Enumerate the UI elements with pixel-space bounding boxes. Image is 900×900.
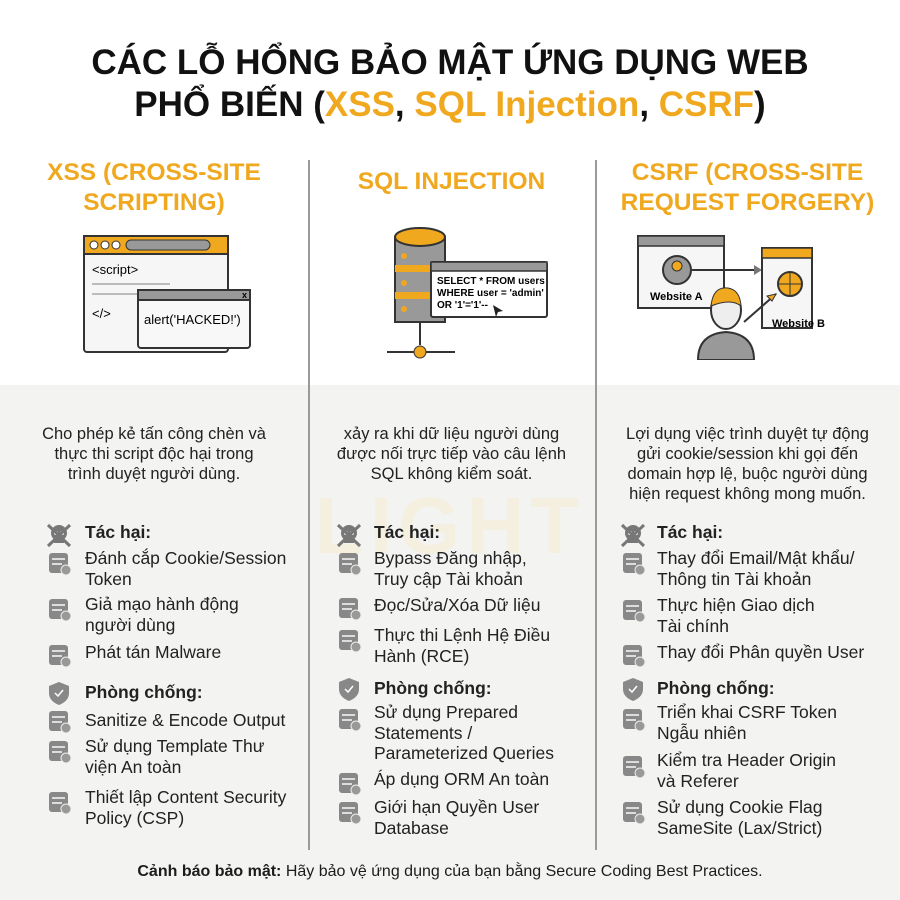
watermark: LIGHT (315, 481, 585, 570)
panel: CSRF list (621, 522, 864, 838)
panel: CSRF list: và Referer (657, 770, 739, 790)
panel: XSS list: Policy (CSP) (85, 808, 184, 828)
panel: SQL list: Đọc/Sửa/Xóa Dữ liệu (374, 595, 540, 615)
illustration: XSS browser (83, 235, 251, 353)
panel: CSRF list: Thực hiện Giao dịch (657, 595, 815, 615)
panel: SQL list: Tác hại: (374, 522, 440, 542)
panel: SQL list: Áp dụng ORM An toàn (374, 769, 549, 789)
panel: CSRF list: SameSite (Lax/Strict) (657, 818, 822, 838)
illustration: CSRF: Website A (650, 291, 703, 303)
panel: SQL list: Bypass Đăng nhập, (374, 548, 527, 568)
panel: XSS list: Tác hại: (85, 522, 151, 542)
illustration: XSS browser: <script> (92, 262, 138, 277)
illustration: XSS browser: alert('HACKED!') (144, 312, 241, 327)
icon: skull (47, 524, 71, 547)
desc: CSRF: gửi cookie/session khi gọi đến (637, 445, 858, 463)
panel: CSRF list: Kiểm tra Header Origin (657, 750, 836, 770)
title: PHỔ BIẾN (XSS, SQL Injection, CSRF) (134, 85, 766, 124)
desc: CSRF: Lợi dụng việc trình duyệt tự động (626, 425, 869, 443)
panel: SQL list: Statements / (374, 722, 472, 742)
illustration: database: OR '1'='1'-- (437, 300, 488, 311)
footer: Cảnh báo bảo mật: Hãy bảo vệ ứng dụng của bạn bằng Secure Coding Best Practices. (137, 863, 763, 880)
panel: XSS list: viện An toàn (85, 756, 181, 776)
desc: XSS: Cho phép kẻ tấn công chèn và (42, 425, 266, 443)
heading: CSRF (621, 159, 874, 216)
illustration: database: SELECT * FROM users (437, 276, 545, 287)
panel: SQL list: Phòng chống: (374, 678, 492, 698)
icon: shield (49, 682, 69, 705)
desc: SQL: xảy ra khi dữ liệu người dùng (344, 425, 559, 443)
panel: SQL list: Parameterized Queries (374, 743, 554, 763)
heading: CSRF: REQUEST FORGERY) (621, 189, 874, 216)
heading: SQL: SQL INJECTION (358, 168, 545, 195)
panel: SQL list: Hành (RCE) (374, 646, 469, 666)
illustration: XSS browser: x (242, 290, 247, 300)
illustration: CSRF (637, 235, 825, 360)
desc: SQL: SQL không kiểm soát. (371, 465, 532, 483)
panel: XSS list (47, 522, 286, 828)
panel: CSRF list: Thông tin Tài khoản (657, 568, 811, 588)
desc: CSRF (626, 425, 869, 503)
panel: SQL list: Truy cập Tài khoản (374, 568, 523, 588)
heading: CSRF: CSRF (CROSS-SITE (632, 159, 863, 186)
panel: SQL list: Giới hạn Quyền User (374, 797, 539, 817)
desc: CSRF: hiện request không mong muốn. (629, 485, 866, 503)
panel: CSRF list: Phòng chống: (657, 678, 775, 698)
panel: CSRF list: Thay đổi Email/Mật khẩu/ (657, 548, 854, 568)
illustration: CSRF: Website B (772, 318, 825, 330)
illustration: database: WHERE user = 'admin' (437, 288, 544, 299)
desc: CSRF: domain hợp lệ, buộc người dùng (627, 465, 868, 483)
panel: XSS list: Đánh cắp Cookie/Session (85, 548, 286, 568)
panel: XSS list: Phát tán Malware (85, 642, 221, 662)
title (91, 42, 809, 124)
illustration: XSS browser: </> (92, 306, 111, 321)
heading: XSS: XSS (CROSS-SITE (47, 159, 261, 186)
panel: XSS list: Thiết lập Content Security (85, 787, 286, 807)
panel: CSRF list: Tài chính (657, 616, 729, 636)
panel: SQL list: Database (374, 818, 449, 838)
panel: XSS list: người dùng (85, 614, 175, 634)
panel: SQL list (337, 522, 554, 838)
panel: SQL list: Sử dụng Prepared (374, 702, 518, 722)
panel: CSRF list: Thay đổi Phân quyền User (657, 642, 864, 662)
panel: XSS list: Sử dụng Template Thư (85, 736, 264, 756)
heading: XSS: SCRIPTING) (83, 189, 225, 216)
desc: XSS (42, 425, 266, 483)
panel: XSS list: Token (85, 568, 132, 588)
illustration: database (387, 227, 548, 358)
panel: CSRF list: Sử dụng Cookie Flag (657, 797, 822, 817)
panel: SQL list: Thực thi Lệnh Hệ Điều (374, 625, 550, 645)
panel: XSS list: Sanitize & Encode Output (85, 710, 285, 730)
heading: XSS (47, 159, 261, 216)
desc: XSS: trình duyệt người dùng. (68, 465, 240, 483)
desc: SQL (337, 425, 566, 483)
panel: XSS list: Giả mạo hành động (85, 594, 239, 614)
desc: XSS: thực thi script độc hại trong (54, 445, 254, 463)
panel: XSS list: Phòng chống: (85, 682, 203, 702)
desc: SQL: được nối trực tiếp vào câu lệnh (337, 445, 566, 463)
panel: CSRF list: Tác hại: (657, 522, 723, 542)
panel: CSRF list: Triển khai CSRF Token (657, 702, 837, 722)
panel: CSRF list: Ngẫu nhiên (657, 722, 747, 742)
title: CÁC LỖ HỔNG BẢO MẬT ỨNG DỤNG WEB (91, 43, 809, 82)
